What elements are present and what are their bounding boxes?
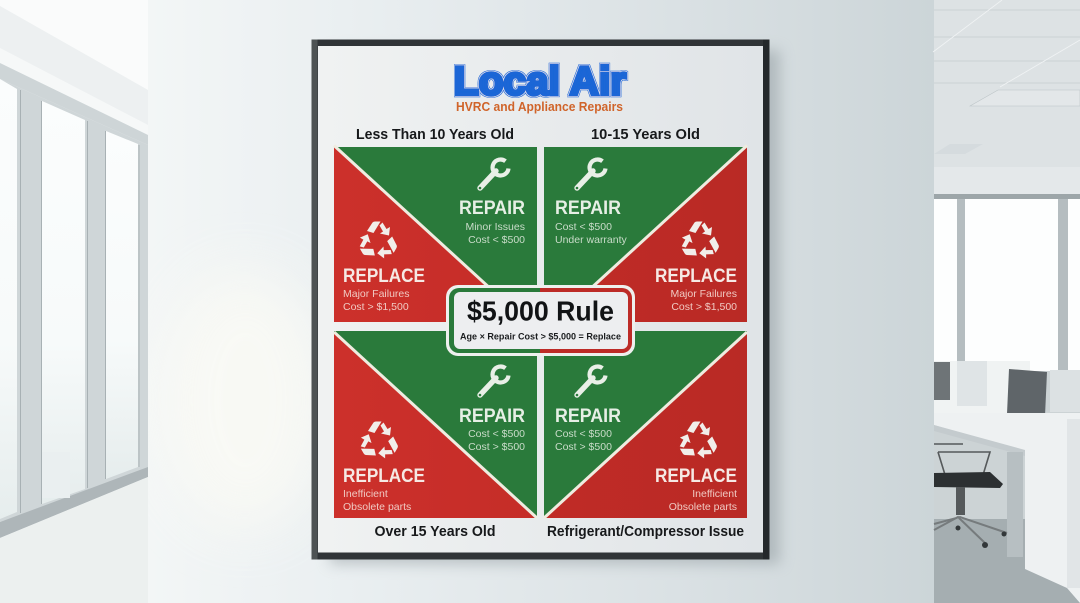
center badge: $5,000 rule bbox=[446, 285, 635, 356]
replace details: Inefficient bbox=[692, 488, 737, 500]
label: repair: REPAIR bbox=[555, 198, 621, 219]
label: repair: REPAIR bbox=[555, 406, 621, 427]
replace details: Obsolete parts bbox=[669, 501, 737, 513]
panel: over 15 years old bbox=[334, 331, 537, 518]
icon: recycle bbox=[355, 222, 400, 261]
replace details: Cost > $1,500 bbox=[671, 301, 737, 313]
label: replace: REPLACE bbox=[343, 466, 425, 487]
icon: wrench bbox=[576, 159, 606, 189]
replace details: Cost > $1,500 bbox=[343, 301, 409, 313]
icon: recycle bbox=[677, 222, 722, 261]
rule formula: Age × Repair Cost > $5,000 = Replace bbox=[460, 332, 621, 342]
panel: refrigerant/compressor issue bbox=[544, 331, 747, 518]
heading: over 15 years: Over 15 Years Old bbox=[374, 524, 496, 540]
repair details: Cost > $500 bbox=[468, 441, 525, 453]
frame shadow bbox=[330, 50, 780, 564]
tagline: HVRC and Appliance Repairs bbox=[456, 100, 623, 114]
label: repair: REPAIR bbox=[459, 406, 525, 427]
repair details: Cost < $500 bbox=[468, 234, 525, 246]
label: replace: REPLACE bbox=[655, 266, 737, 287]
label: replace: REPLACE bbox=[655, 466, 737, 487]
label: replace: REPLACE bbox=[343, 266, 425, 287]
icon: recycle bbox=[356, 422, 401, 461]
replace details: Major Failures bbox=[670, 288, 737, 300]
right room: office bbox=[933, 0, 1080, 603]
repair details: Cost < $500 bbox=[555, 221, 612, 233]
repair details: Minor Issues bbox=[465, 221, 525, 233]
icon: wrench bbox=[479, 159, 508, 189]
heading: 10-15 years: 10-15 Years Old bbox=[591, 127, 700, 143]
panel: 10-15 years old bbox=[544, 146, 747, 323]
replace details: Major Failures bbox=[343, 288, 410, 300]
logo: Local Air: Local Air bbox=[454, 60, 626, 104]
sunlight patch on wall bbox=[160, 270, 330, 530]
label: repair: REPAIR bbox=[459, 198, 525, 219]
wall background bbox=[148, 0, 934, 603]
replace details: Inefficient bbox=[343, 488, 388, 500]
icon: wrench bbox=[576, 366, 606, 396]
repair details: Cost < $500 bbox=[468, 428, 525, 440]
heading: less than 10 years: Less Than 10 Years Old bbox=[356, 127, 514, 143]
repair details: Under warranty bbox=[555, 234, 628, 246]
icon: recycle bbox=[675, 422, 720, 461]
icon: wrench bbox=[479, 366, 508, 396]
repair details: Cost < $500 bbox=[555, 428, 612, 440]
replace details: Obsolete parts bbox=[343, 501, 411, 513]
rule title: $5,000 Rule bbox=[467, 296, 614, 326]
heading: refrigerant/compressor: Refrigerant/Compressor Issue bbox=[547, 524, 744, 540]
poster frame bbox=[312, 40, 770, 560]
left room with windows bbox=[0, 0, 148, 603]
panel: less than 10 years old bbox=[334, 146, 537, 323]
repair details: Cost > $500 bbox=[555, 441, 612, 453]
